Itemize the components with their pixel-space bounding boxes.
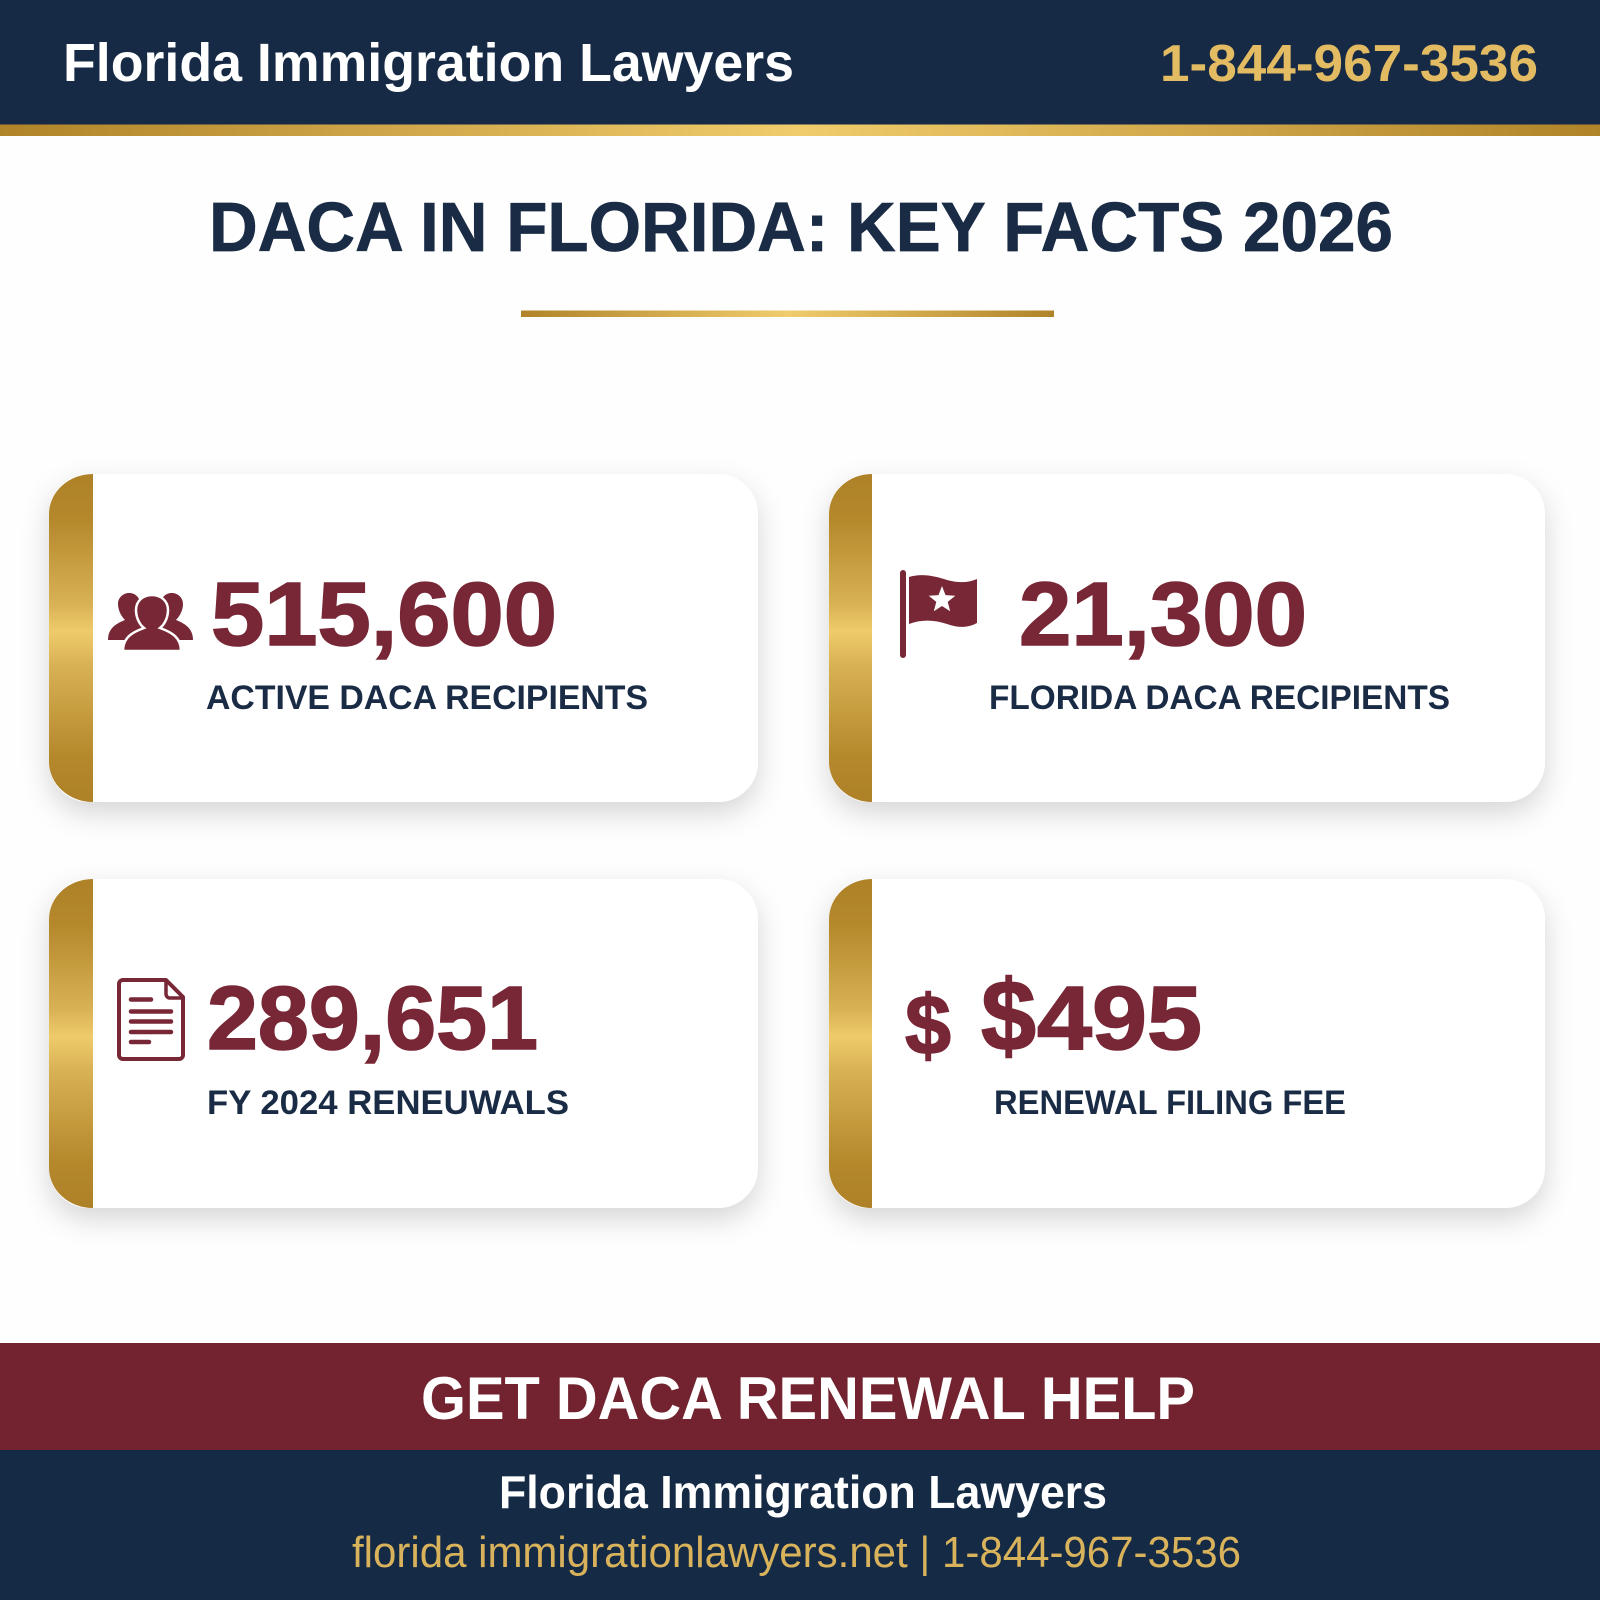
stat value: $ [981, 960, 1036, 1072]
icon: document [119, 980, 183, 1059]
header band [0, 0, 1600, 136]
title underline [521, 310, 1054, 317]
stat value: 289,651 [207, 969, 538, 1069]
footer band [0, 1450, 1600, 1600]
stat value: 515,600 [211, 565, 557, 665]
stat value: 21,300 [1019, 565, 1307, 665]
title: DACA IN FLORIDA: KEY FACTS 2026 [209, 188, 1393, 266]
panel: FY 2024 renewals [49, 879, 758, 1208]
stat label: ACTIVE DACA RECIPIENTS [206, 679, 648, 717]
stat label: RENEWAL FILING FEE [994, 1084, 1346, 1122]
panel: active DACA recipients [49, 474, 758, 802]
stat label: FLORIDA DACA RECIPIENTS [989, 679, 1450, 717]
icon: people [108, 593, 193, 651]
footer firm name: Florida Immigration Lawyers [499, 1466, 1107, 1518]
call-to-action band [0, 1343, 1600, 1450]
stat value [981, 960, 1202, 1072]
stat label: FY 2024 RENEUWALS [207, 1084, 569, 1122]
stat value: 495 [1037, 969, 1202, 1069]
call-to-action text: GET DACA RENEWAL HELP [421, 1365, 1195, 1432]
footer contact line: florida immigrationlawyers.net | 1-844-967-3536 [352, 1528, 1241, 1577]
icon: flag [900, 570, 977, 658]
header phone number: 1-844-967-3536 [1160, 35, 1538, 93]
panel: Florida DACA recipients [829, 474, 1545, 802]
panel: renewal filing fee [829, 879, 1545, 1208]
icon: dollar sign: $ [905, 978, 951, 1072]
header firm name: Florida Immigration Lawyers [63, 33, 794, 93]
